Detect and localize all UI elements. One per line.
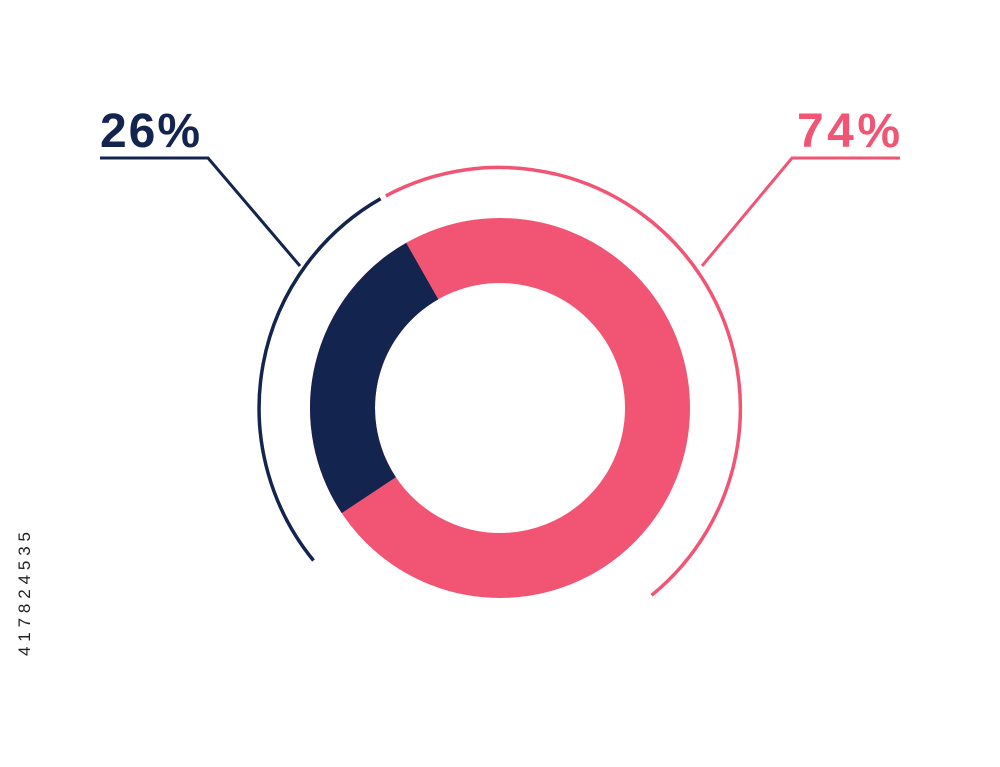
outer arc: navy [259,199,381,560]
watermark id: 417824535 [15,532,34,656]
label: 26%: 26% [100,105,200,158]
leader line: pink [702,158,900,266]
segment: 26% navy [343,271,422,495]
donut chart [342,250,658,566]
outer arc: pink [386,167,740,595]
label: 74%: 74% [797,105,900,158]
segment: 74% pink [342,250,658,566]
leader line: navy [100,158,300,266]
